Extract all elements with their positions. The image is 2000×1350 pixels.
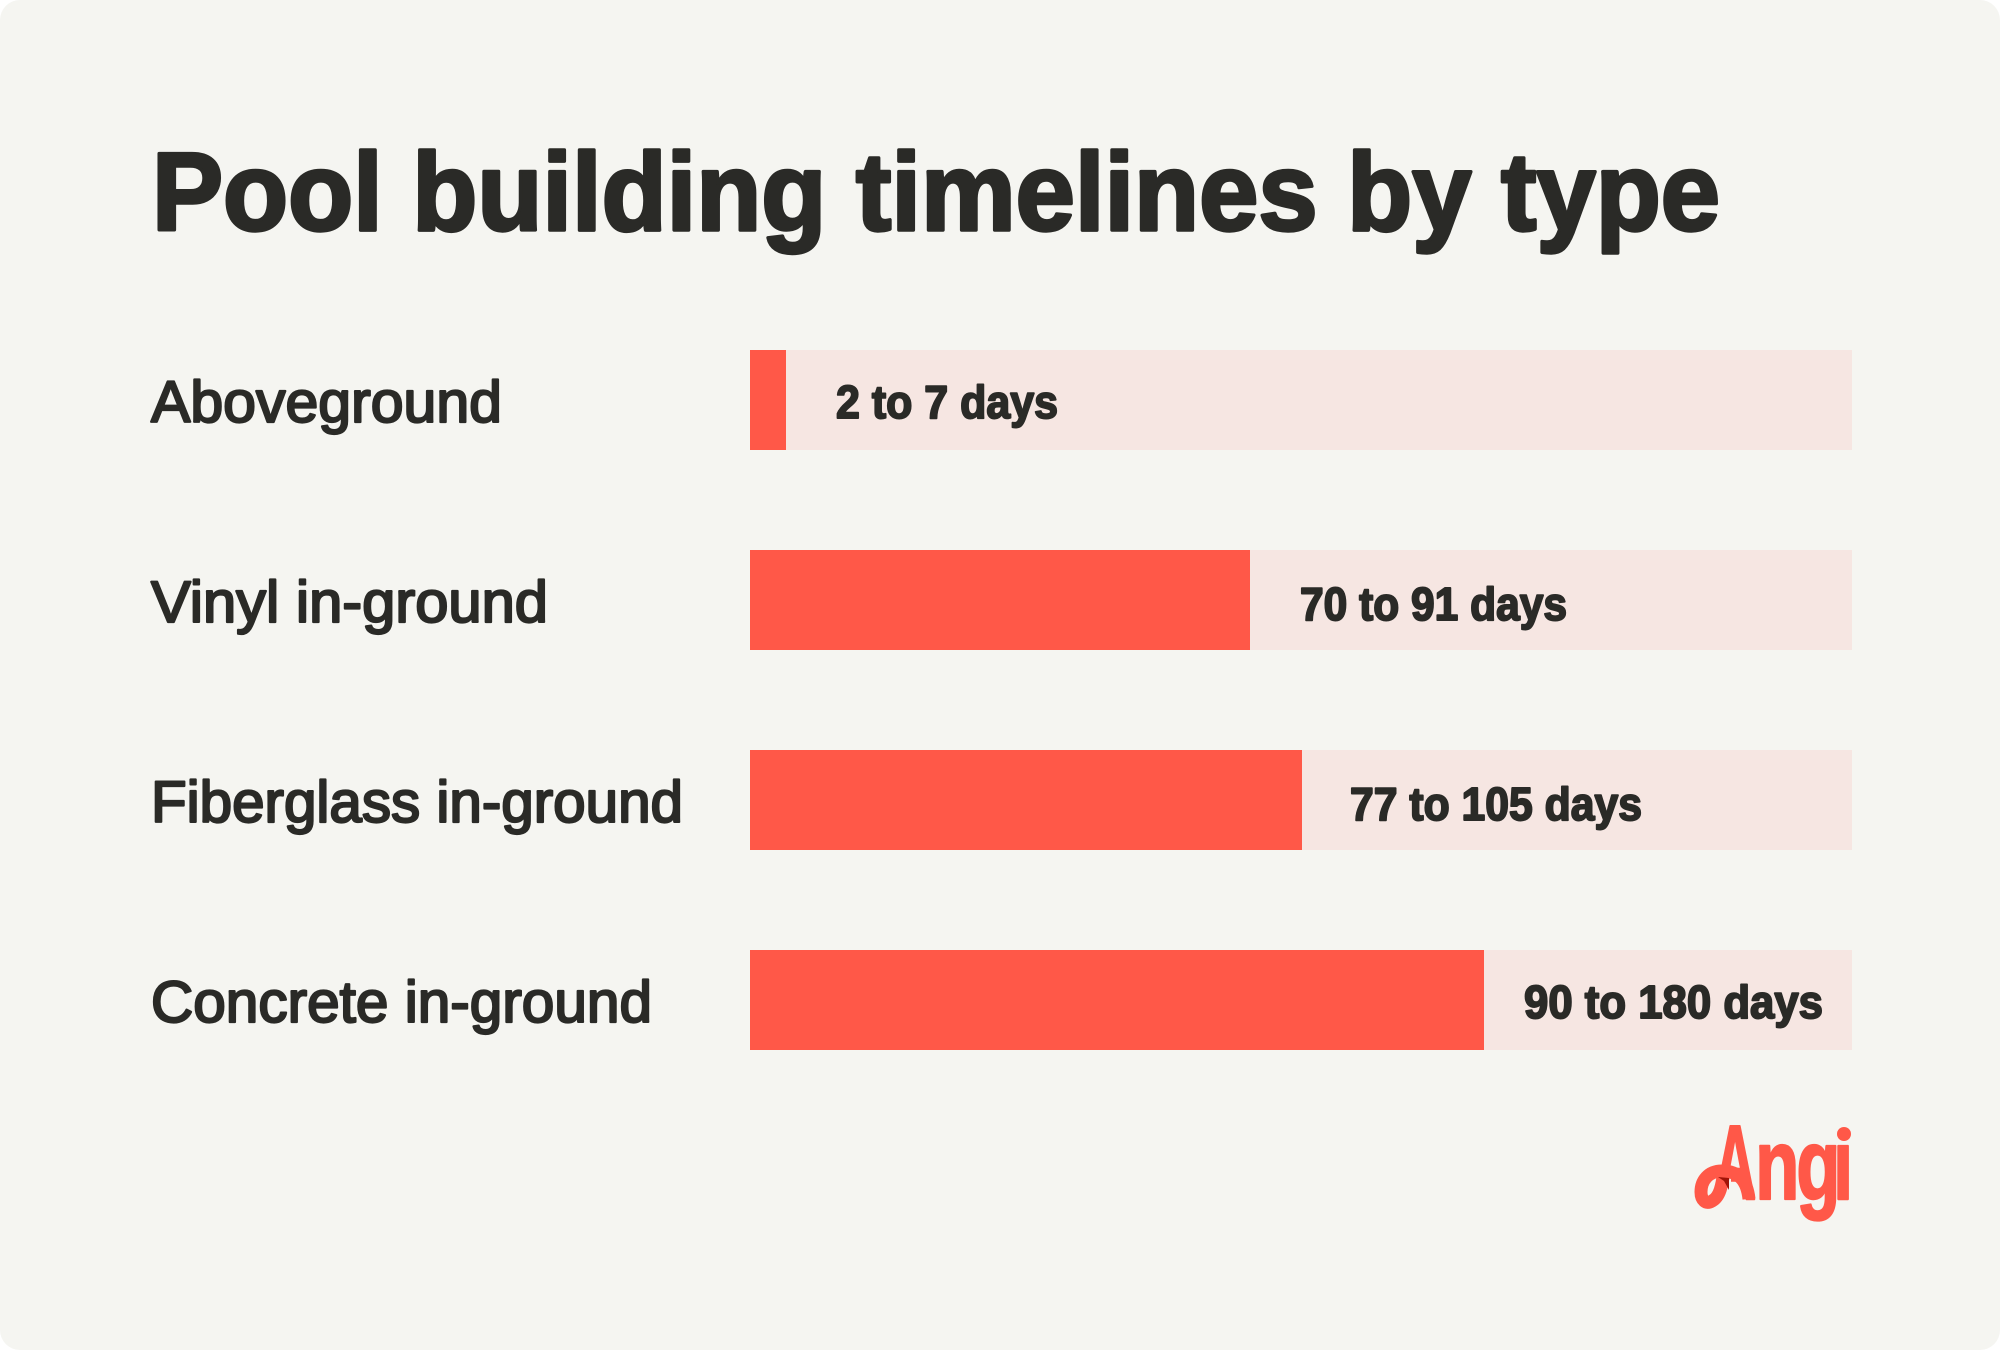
- row: Fiberglass in-ground: [151, 750, 1852, 850]
- logo: Angi: ngi: [1755, 1108, 1853, 1221]
- value: 77 to 105 days: 77 to 105 days: [1350, 778, 1642, 830]
- label: Fiberglass in-ground: Fiberglass in-ground: [151, 770, 683, 835]
- title: Pool building timelines by type: [152, 131, 1720, 254]
- row: Vinyl in-ground: [151, 550, 1852, 650]
- label: Concrete in-ground: Concrete in-ground: [151, 970, 652, 1035]
- value: 70 to 91 days: 70 to 91 days: [1300, 578, 1567, 630]
- bar: Vinyl in-ground: [750, 550, 1852, 650]
- label: Vinyl in-ground: Vinyl in-ground: [151, 570, 548, 635]
- row: Concrete in-ground: [151, 950, 1852, 1050]
- value: 90 to 180 days: 90 to 180 days: [1524, 976, 1823, 1028]
- logo: Angi: [1701, 1105, 1856, 1223]
- chart: pool building timelines: [151, 350, 1852, 1050]
- bar: Fiberglass in-ground: [750, 750, 1852, 850]
- row: Aboveground: [151, 350, 1852, 450]
- bar: Aboveground: [750, 350, 1852, 450]
- label: Aboveground: Aboveground: [151, 370, 502, 435]
- value: 2 to 7 days: 2 to 7 days: [836, 376, 1058, 428]
- bar: Concrete in-ground: [750, 950, 1852, 1050]
- logo: Angi: A: [1714, 1105, 1756, 1223]
